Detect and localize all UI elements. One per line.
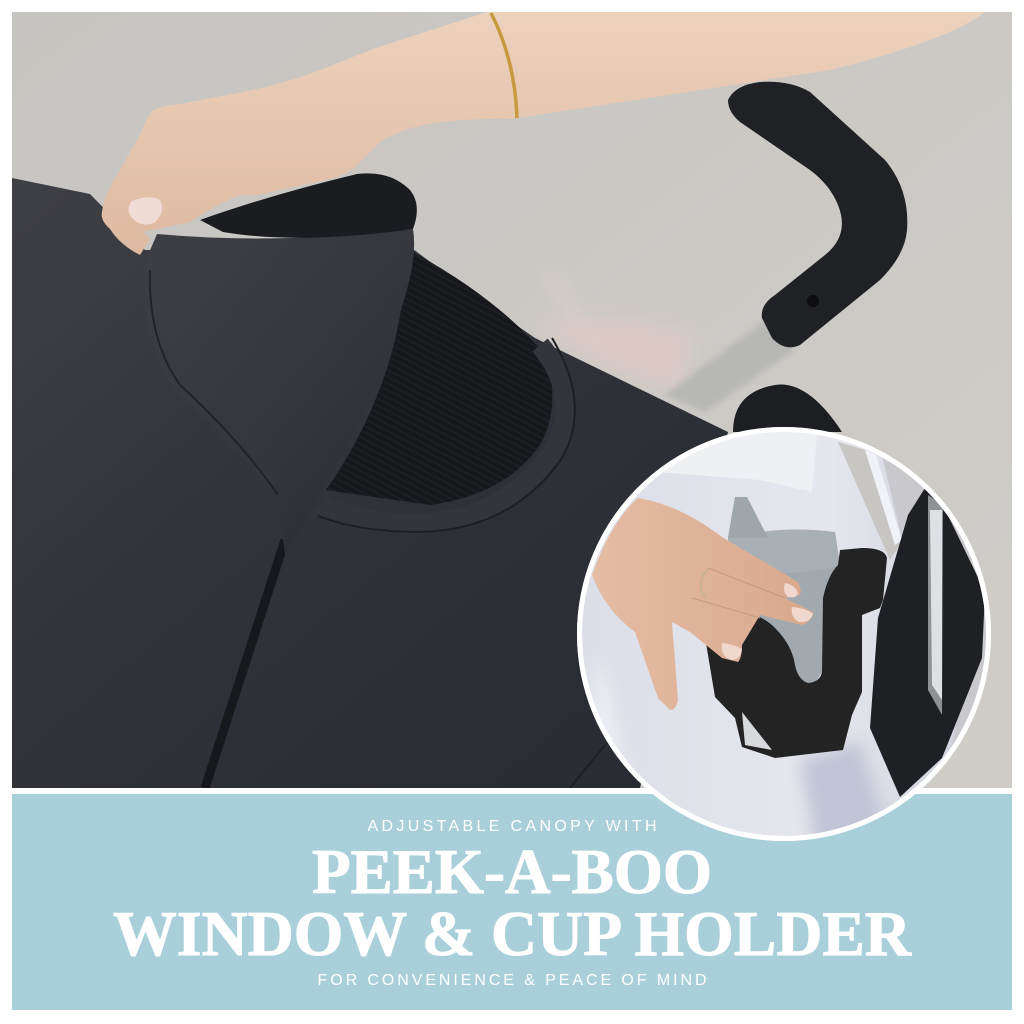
mesh peek-a-boo window xyxy=(326,252,552,505)
hand xyxy=(592,498,813,710)
sippy cup xyxy=(725,497,840,683)
background beyond pole xyxy=(882,458,986,746)
headline line 2: WINDOW & CUP HOLDER xyxy=(113,898,912,969)
canopy fabric xyxy=(12,178,728,788)
ring xyxy=(701,569,709,598)
cup holder xyxy=(700,548,887,758)
subline: FOR CONVENIENCE & PEACE OF MIND xyxy=(318,972,706,989)
inset circle: cup holder xyxy=(570,420,1000,850)
blurred cup in background xyxy=(549,312,688,386)
fingernails xyxy=(722,583,813,660)
thumbnail xyxy=(128,197,162,225)
bracelet xyxy=(491,13,517,118)
stroller handle xyxy=(665,82,907,432)
headline line 1: PEEK-A-BOO xyxy=(312,836,712,907)
canopy flap xyxy=(144,229,414,555)
arm and hand xyxy=(102,12,985,255)
panel: blue caption band xyxy=(12,794,1012,1010)
shirt collar xyxy=(664,432,817,492)
jacket xyxy=(870,488,985,797)
caption text xyxy=(113,818,912,989)
shirt folds xyxy=(796,739,886,834)
kicker: ADJUSTABLE CANOPY WITH xyxy=(368,818,656,835)
stroller pole xyxy=(838,442,900,560)
panel: photo of stroller canopy xyxy=(12,12,1012,788)
